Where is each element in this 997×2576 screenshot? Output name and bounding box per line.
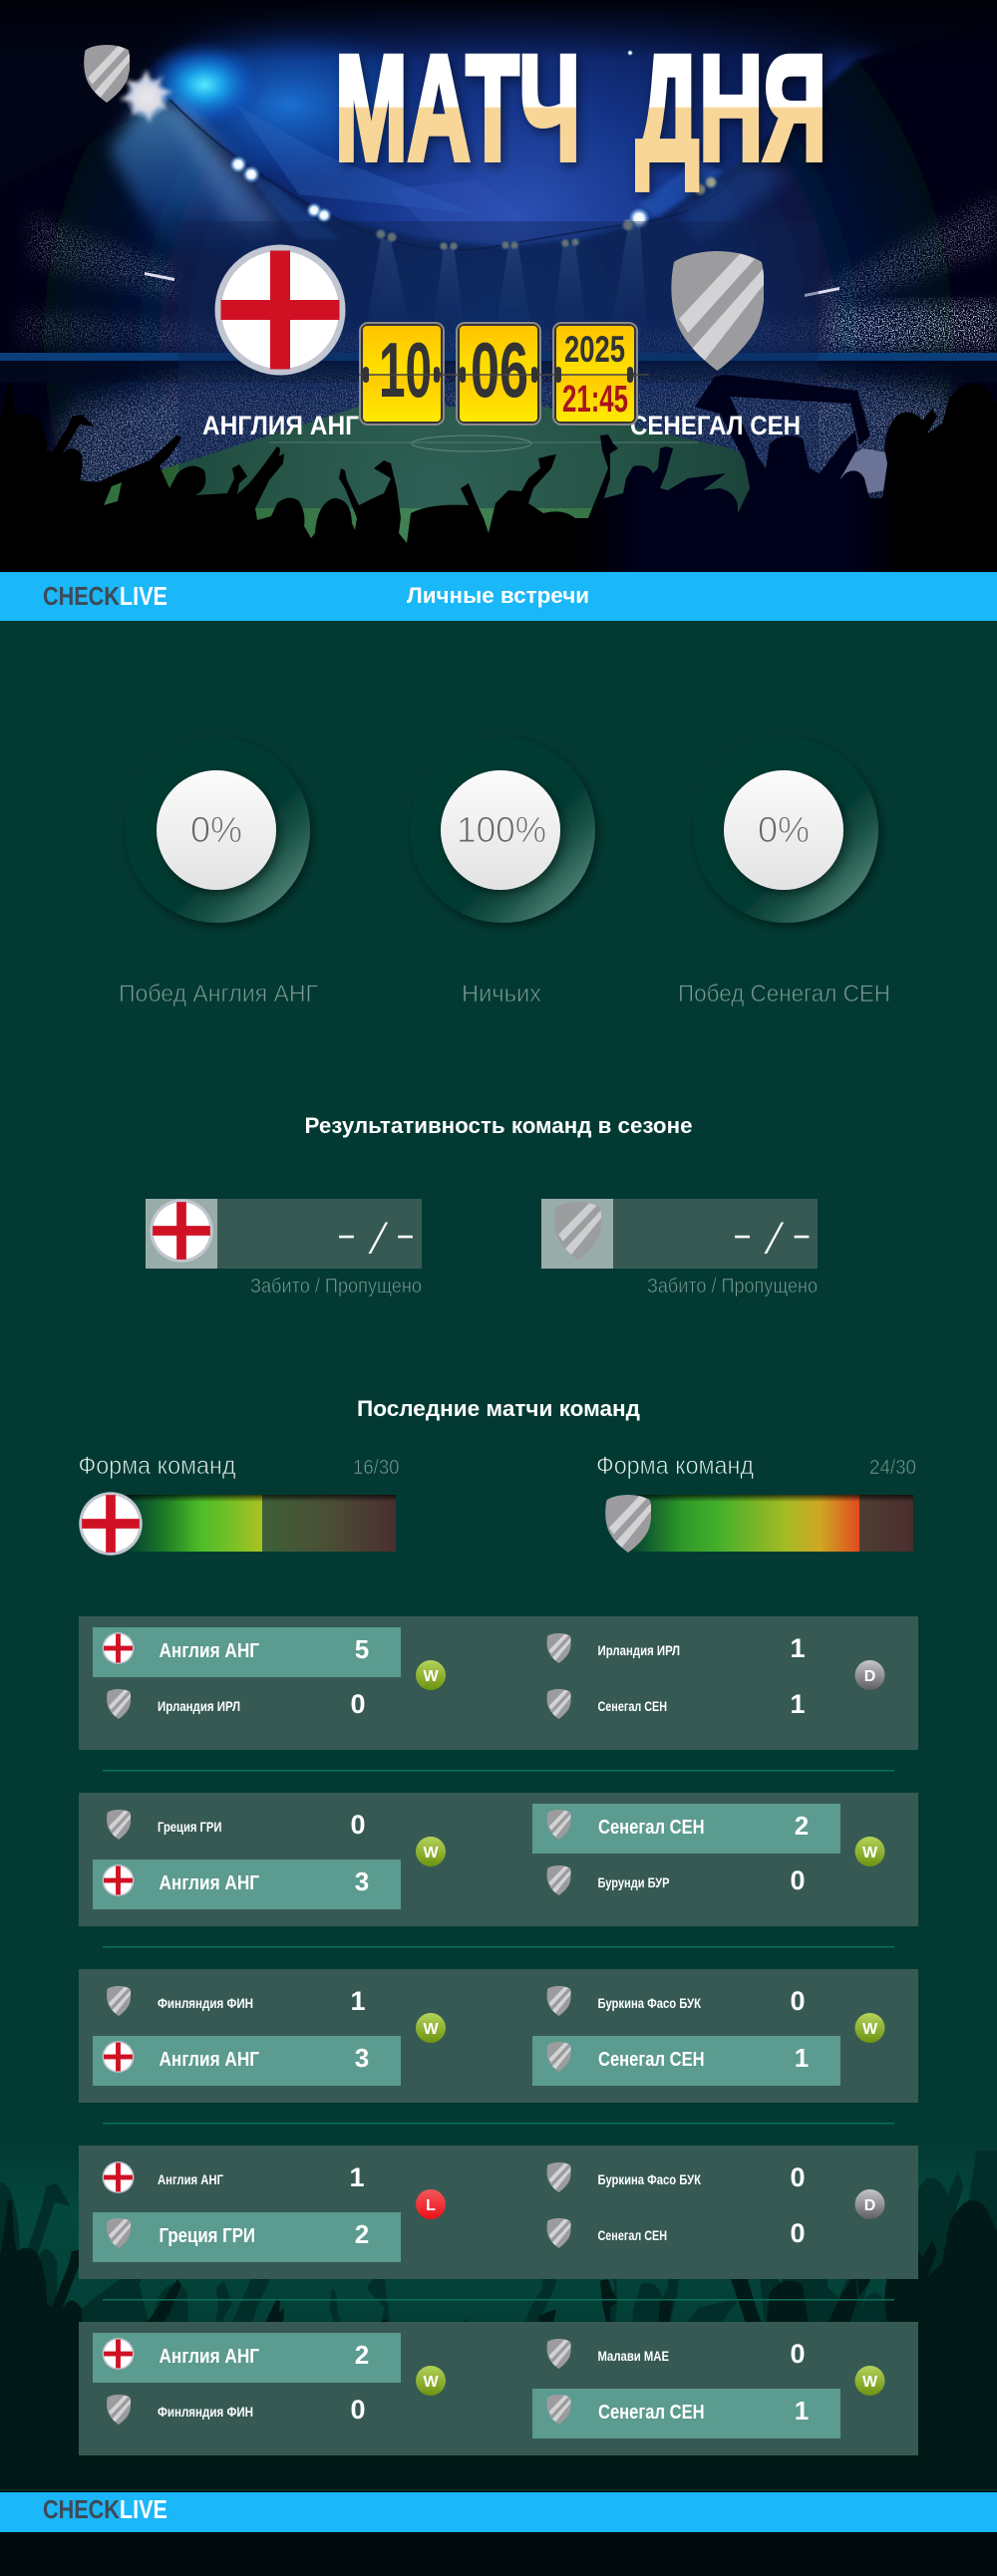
icon: England flag (150, 1199, 213, 1263)
match panel 1: D (864, 1668, 875, 1685)
match panel 2: W (862, 1845, 878, 1861)
goals bar: England: – (339, 1209, 354, 1258)
footer crowd background (0, 2150, 997, 2492)
hero crowd silhouette (0, 375, 997, 572)
match panel 4: Англия АНГ (158, 2171, 223, 2187)
flip card: year and time (553, 323, 637, 425)
goals bar: England (146, 1199, 422, 1269)
caption: England goals: Забито / Пропущено (250, 1276, 422, 1297)
match panel 3: Сенегал СЕН (598, 2049, 705, 2071)
logo: CHECKLIVE (43, 2494, 167, 2524)
match panel 2: W (423, 1845, 439, 1861)
date and time flip cards (359, 323, 649, 425)
match panel 4: 0 (790, 2162, 806, 2192)
match panel 1: W (423, 1668, 439, 1685)
heading: last matches: Последние матчи команд (357, 1396, 640, 1421)
match panel 2: Греция ГРИ (158, 1819, 221, 1835)
bottom blue bar (0, 2492, 997, 2532)
form value: 24/30 (869, 1457, 916, 1479)
form meter: Senegal (596, 1452, 916, 1553)
form label: Форма команд (78, 1452, 236, 1480)
match panel 2: 0 (350, 1810, 366, 1840)
match panel 1 (79, 1616, 918, 1750)
match panel 5: Англия АНГ (160, 2346, 259, 2368)
match panel 3: Буркина Фасо БУК (598, 1995, 701, 2011)
match panel 4: 0 (790, 2218, 806, 2248)
icon: Senegal shield (671, 251, 766, 371)
match info panel (178, 221, 819, 508)
match panel 3: 0 (790, 1986, 806, 2016)
match panel 2: 2 (795, 1811, 809, 1841)
label: draws: Ничьих (462, 981, 541, 1007)
goals bar: Senegal: – (735, 1209, 750, 1258)
stat circle: draws: 100% (457, 809, 546, 850)
form label: Форма команд (596, 1452, 754, 1480)
form value: 16/30 (353, 1457, 399, 1479)
stat circle: draws (410, 737, 595, 923)
match panel 4: D (864, 2197, 875, 2214)
page background (0, 621, 997, 2576)
flip card: month (457, 323, 540, 425)
match panel 2: Англия АНГ (160, 1872, 259, 1894)
icon: Senegal shield (605, 1495, 652, 1553)
match panel 2: 0 (790, 1865, 806, 1895)
match panel 2: Сенегал СЕН (598, 1817, 705, 1839)
match panel 5: W (862, 2374, 878, 2391)
match panel 1: Ирландия ИРЛ (598, 1642, 680, 1658)
match panel 3: Финляндия ФИН (158, 1995, 253, 2011)
flip card: day: 10 (379, 326, 432, 414)
match panel 2 (79, 1793, 918, 1926)
icon: small shield (84, 45, 131, 103)
page bottom strip (0, 2532, 997, 2576)
match panel 1: 1 (790, 1633, 806, 1663)
label: England wins: Побед Англия АНГ (119, 981, 318, 1007)
top blue bar (0, 572, 997, 621)
flip card: month: 06 (471, 326, 528, 414)
match panel 5: Малави МАЕ (598, 2348, 669, 2364)
floodlight beams and lamps (120, 50, 718, 344)
match panel 3: W (423, 2021, 439, 2038)
hero stadium background (0, 0, 997, 572)
match panel 4: 2 (355, 2219, 369, 2249)
match panel 2: Бурунди БУР (598, 1874, 670, 1890)
match panel 3: 1 (350, 1986, 366, 2016)
match panel 2: 3 (355, 1866, 369, 1896)
label: Senegal wins: Побед Сенегал СЕН (678, 981, 890, 1007)
title: МАТЧ (335, 24, 580, 191)
stat circle: Senegal wins: 0% (758, 809, 810, 850)
match panel 4: L (426, 2197, 436, 2214)
stat circle: England wins: 0% (190, 809, 242, 850)
match panel 1: Ирландия ИРЛ (158, 1698, 240, 1714)
goals bar: Senegal: – (794, 1209, 810, 1258)
match panel 3: W (862, 2021, 878, 2038)
title: ДНЯ (636, 24, 827, 191)
stat circle: Senegal wins (693, 737, 878, 923)
match panel 5: 0 (790, 2339, 806, 2369)
team name: England: АНГЛИЯ АНГ (202, 411, 359, 440)
match panel 3: 3 (355, 2043, 369, 2073)
match panel 4: Буркина Фасо БУК (598, 2171, 701, 2187)
match panel 3: 1 (795, 2043, 809, 2073)
match panel 4: Сенегал СЕН (598, 2227, 667, 2243)
match panel 3 (79, 1969, 918, 2103)
icon: England flag (79, 1492, 143, 1556)
icon: Senegal shield (554, 1202, 602, 1260)
hero pitch (110, 407, 897, 572)
goals bar: England: / (365, 1215, 391, 1264)
match panel 5 (79, 2322, 918, 2455)
match panel 4: 1 (349, 2162, 365, 2192)
flip card: year and time: 21:45 (562, 379, 628, 421)
flip card: year and time: 2025 (564, 329, 625, 370)
match panel 4 (79, 2146, 918, 2279)
team name: Senegal: СЕНЕГАЛ СЕН (630, 411, 801, 440)
hero crowd stands (0, 189, 997, 513)
match panel 5: W (423, 2374, 439, 2391)
match panel 1: Англия АНГ (160, 1640, 259, 1662)
match panel 1: 5 (355, 1634, 369, 1664)
match panel 3: Англия АНГ (160, 2049, 259, 2071)
match panel 1: 0 (350, 1689, 366, 1719)
goals bar: Senegal (541, 1199, 818, 1269)
match panel 5: 2 (355, 2340, 369, 2370)
heading: head to head: Личные встречи (407, 583, 589, 608)
match panel 5: 1 (795, 2396, 809, 2426)
stat circle: England wins (125, 737, 310, 923)
match panel 5: 0 (350, 2395, 366, 2425)
match panel 1: Сенегал СЕН (598, 1698, 667, 1714)
heading: season performance: Результативность команд в сезоне (305, 1113, 692, 1138)
caption: Senegal goals: Забито / Пропущено (647, 1276, 818, 1297)
match panel 4: Греция ГРИ (160, 2225, 255, 2247)
match panel 5: Финляндия ФИН (158, 2404, 253, 2420)
match panel 5: Сенегал СЕН (598, 2402, 705, 2424)
logo: CHECKLIVE (43, 581, 167, 611)
goals bar: Senegal: / (761, 1215, 787, 1264)
flip card: day (360, 323, 444, 425)
goals bar: England: – (398, 1209, 413, 1258)
match panel 1: 1 (790, 1689, 806, 1719)
form meter: England (78, 1452, 399, 1556)
icon: England flag (215, 245, 345, 375)
